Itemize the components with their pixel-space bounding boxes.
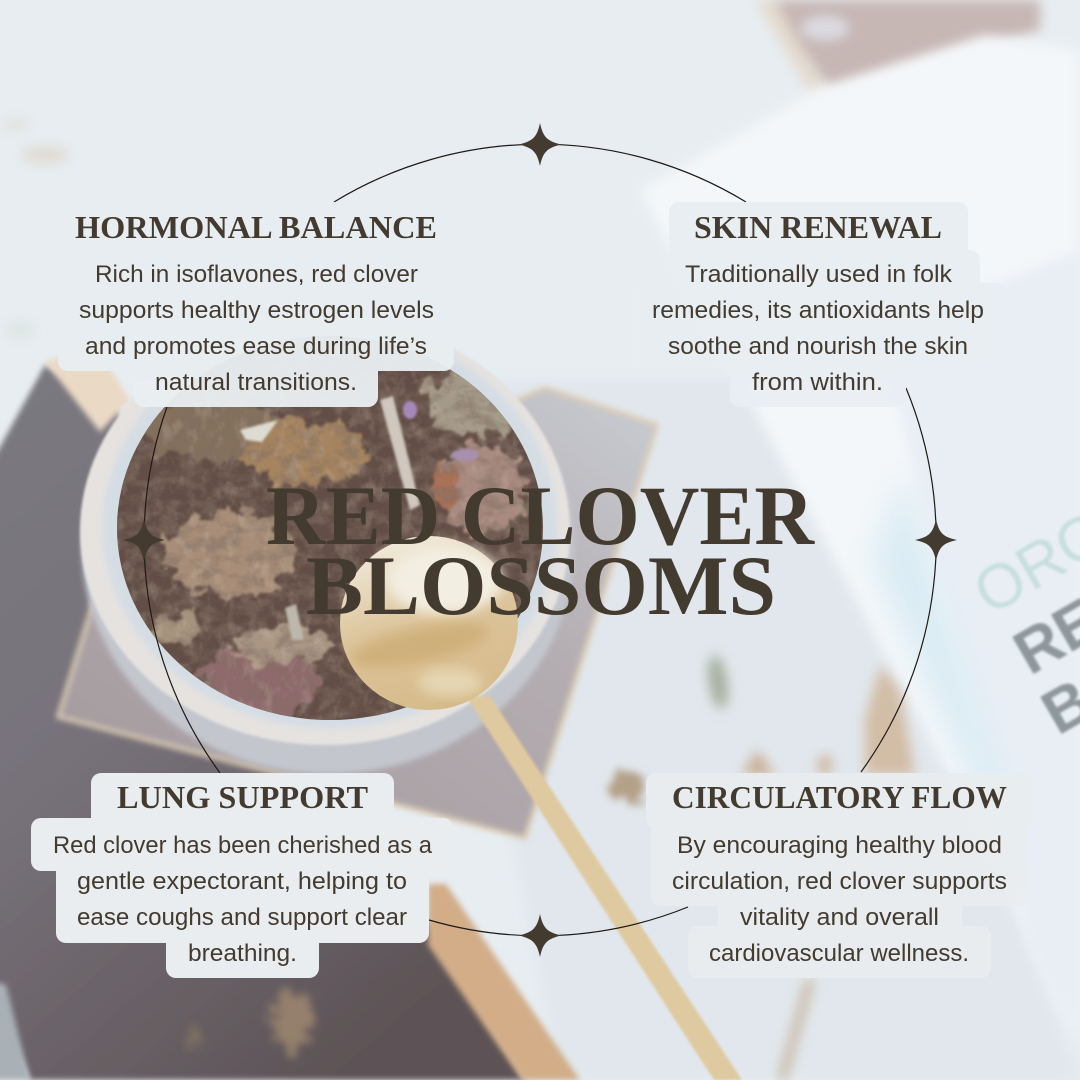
heading: LUNG SUPPORT: [117, 779, 368, 815]
tray: [0, 365, 525, 1080]
coaster: [58, 388, 657, 838]
star: bottom: [519, 914, 561, 957]
body text: breathing.: [188, 940, 297, 967]
body text: [672, 832, 1007, 967]
body text: circulation, red clover supports: [672, 868, 1007, 895]
circular frame: [144, 144, 936, 936]
brown fleck near panel: [610, 772, 646, 804]
title: [266, 469, 816, 633]
body text: vitality and overall: [740, 904, 939, 931]
body text: [79, 261, 434, 396]
body text: gentle expectorant, helping to: [77, 868, 407, 895]
heading: HORMONAL BALANCE: [75, 209, 437, 245]
bag lettering: [962, 498, 1080, 748]
blurred dried flower on tray: [187, 988, 315, 1052]
body text: from within.: [752, 369, 883, 396]
arc: top: [334, 144, 746, 202]
body text: By encouraging healthy blood: [677, 832, 1002, 859]
body text: cardiovascular wellness.: [709, 940, 969, 967]
body text: Red clover has been cherished as a: [53, 832, 432, 859]
body text: soothe and nourish the skin: [668, 333, 968, 360]
body text: Rich in isoflavones, red clover: [95, 261, 418, 288]
panel: circulatory flow: [646, 773, 1033, 978]
title: RED CLOVER: [266, 469, 816, 563]
body text: [53, 832, 432, 967]
arc: bottom: [429, 907, 688, 936]
star: right: [915, 519, 957, 561]
panel: lung support: [31, 773, 453, 978]
body text: Traditionally used in folk: [685, 261, 953, 288]
gold spoon: [340, 536, 742, 1080]
arc: left: [144, 407, 220, 773]
bowl: [80, 317, 574, 774]
arc: right: [861, 388, 936, 772]
blurred top-right wood box: [755, 0, 1040, 92]
product bag: [640, 35, 1080, 1040]
panel: hormonal balance: [50, 202, 462, 407]
panel: skin renewal: [633, 202, 1005, 407]
body text: and promotes ease during life’s: [85, 333, 427, 360]
star: top: [519, 123, 561, 166]
tray corner sheen: [0, 980, 30, 1080]
heading: CIRCULATORY FLOW: [672, 779, 1007, 815]
blurred herb flecks on marble: [705, 654, 915, 1080]
body text: supports healthy estrogen levels: [79, 297, 434, 324]
tray wooden edge: [45, 345, 580, 1080]
heading: SKIN RENEWAL: [694, 209, 942, 245]
tea contents: [117, 369, 543, 720]
blurred flecks top-left: [0, 119, 69, 339]
body text: natural transitions.: [155, 369, 357, 396]
body text: remedies, its antioxidants help: [652, 297, 984, 324]
blurred marble table: [420, 380, 1080, 1080]
title: BLOSSOMS: [306, 539, 776, 633]
body text: [652, 261, 984, 396]
body text: ease coughs and support clear: [77, 904, 407, 931]
star: left: [123, 519, 165, 561]
